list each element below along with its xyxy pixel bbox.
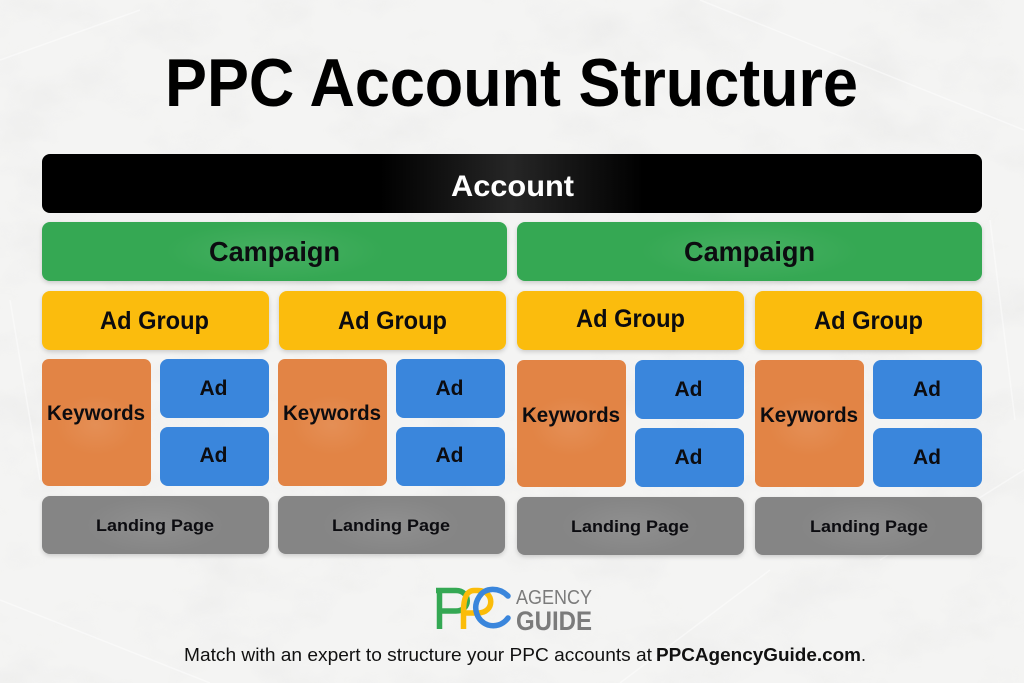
ad 1b: Ad (200, 444, 228, 467)
panel: campaign right: Campaign (684, 236, 815, 267)
ad group 4 (755, 291, 982, 350)
ad 3b (635, 428, 744, 487)
ad 3a: Ad (674, 378, 702, 401)
logo wordmark (516, 587, 592, 636)
ad 4b (873, 428, 982, 487)
keywords 3: Keywords (522, 404, 620, 427)
keywords 4 (755, 360, 864, 487)
ad group 1: Ad Group (100, 307, 209, 335)
panel: campaign left: Campaign (209, 236, 340, 267)
panel: campaign left (42, 221, 507, 281)
ad 3a (635, 360, 744, 419)
icon: logo mark (436, 589, 508, 629)
keywords 2: Keywords (283, 402, 381, 425)
keywords 1: Keywords (47, 402, 145, 425)
ad 2b (396, 427, 505, 486)
ad group 2: Ad Group (338, 307, 447, 335)
landing page 1: Landing Page (96, 516, 214, 535)
landing page 2: Landing Page (332, 516, 450, 535)
ad group 1 (42, 291, 269, 350)
logo: PPC Agency Guide (436, 587, 592, 636)
logo wordmark: AGENCY (516, 587, 592, 609)
landing page 4 (755, 497, 982, 555)
title: PPC Account Structure (165, 45, 858, 121)
ad 2b: Ad (436, 444, 464, 467)
ad group 3 (517, 291, 744, 350)
ad 4a: Ad (913, 378, 941, 401)
ad 4b: Ad (913, 446, 941, 469)
panel: account: Account (451, 170, 574, 203)
ad 3b: Ad (674, 446, 702, 469)
logo wordmark: GUIDE (516, 606, 592, 636)
panel: account (42, 154, 982, 213)
landing page 3: Landing Page (571, 517, 689, 536)
keywords 1 (42, 359, 151, 486)
keywords 4: Keywords (760, 404, 858, 427)
keywords 3 (517, 360, 626, 487)
footer call to action: PPCAgencyGuide.com (656, 645, 861, 665)
ad group 2 (279, 291, 506, 350)
ad group 3: Ad Group (576, 305, 685, 333)
footer call to action: Match with an expert to structure your PPC accounts at (184, 645, 652, 665)
ad 1a: Ad (200, 377, 228, 400)
keywords 2 (278, 359, 387, 486)
ad 4a (873, 360, 982, 419)
footer call to action (184, 645, 866, 665)
landing page 2 (278, 496, 505, 554)
panel: campaign right (517, 221, 982, 281)
ad 2a: Ad (436, 377, 464, 400)
ad 1a (160, 359, 269, 418)
ad 1b (160, 427, 269, 486)
ad group 4: Ad Group (814, 307, 923, 335)
footer call to action: . (861, 645, 866, 665)
landing page 4: Landing Page (810, 517, 928, 536)
landing page 1 (42, 496, 269, 554)
ad 2a (396, 359, 505, 418)
landing page 3 (517, 497, 744, 555)
